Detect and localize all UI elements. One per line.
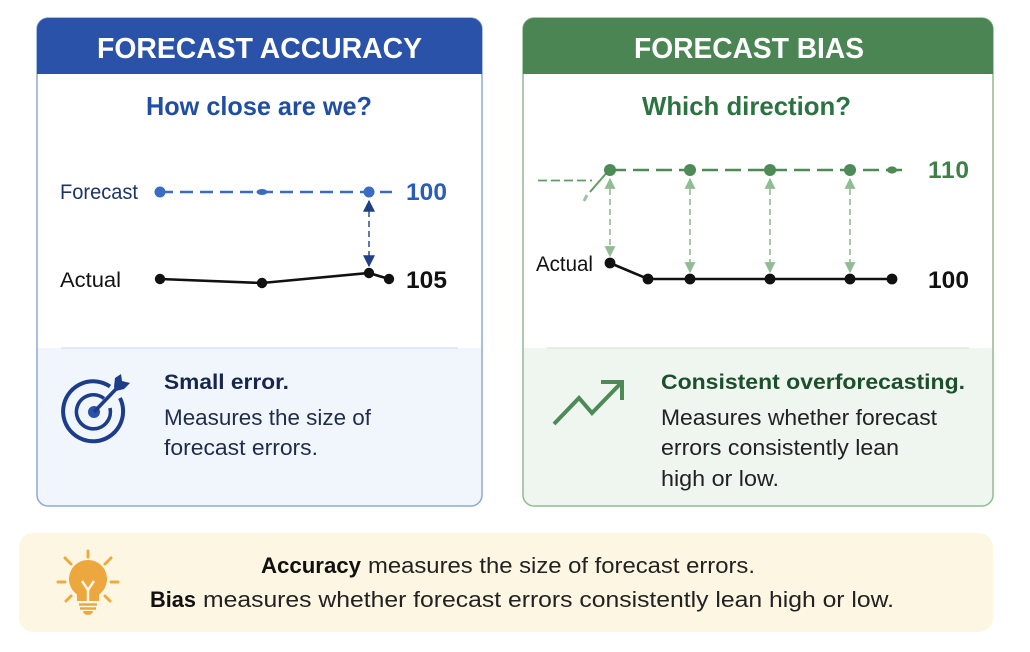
icon: light bulb bbox=[58, 551, 118, 615]
chart: forecast versus actual bbox=[60, 179, 447, 294]
error arrow bbox=[368, 201, 370, 266]
text: bias summary: Bias bbox=[150, 587, 196, 612]
actual label: Actual bbox=[60, 268, 121, 292]
text: small error bbox=[164, 370, 372, 460]
forecast label: Forecast bbox=[60, 181, 138, 204]
text: accuracy summary: Accuracy bbox=[261, 553, 361, 578]
panel: forecast accuracy bbox=[37, 18, 482, 506]
chart: persistent forecast gap bbox=[536, 157, 969, 294]
text: small error: forecast errors. bbox=[164, 435, 318, 460]
text: small error: Small error. bbox=[164, 370, 289, 394]
text: consistent overforecasting: Consistent overforecasting. bbox=[661, 370, 965, 394]
text: consistent overforecasting bbox=[661, 370, 965, 491]
stray forecast lead-in bbox=[538, 170, 609, 201]
icon: upward trend arrow bbox=[554, 382, 622, 424]
forecast dashed line bbox=[154, 186, 392, 198]
callout: summary bbox=[19, 533, 993, 632]
text: small error: Measures the size of bbox=[164, 405, 372, 430]
panel: forecast bias bbox=[523, 18, 993, 506]
forecast dashed line bbox=[604, 164, 908, 176]
icon: target with arrow bbox=[63, 374, 130, 441]
text: consistent overforecasting: high or low. bbox=[661, 466, 779, 491]
actual value: 100 bbox=[928, 267, 969, 294]
gap arrows bbox=[610, 179, 850, 272]
header: forecast accuracy: FORECAST ACCURACY bbox=[97, 33, 422, 65]
header: forecast accuracy bbox=[37, 18, 482, 74]
heading: how close are we: How close are we? bbox=[146, 91, 372, 121]
actual line bbox=[605, 258, 897, 284]
forecast value: 110 bbox=[928, 157, 969, 184]
actual label: Actual bbox=[536, 253, 593, 276]
text: bias summary: measures whether forecast errors consistently lean high or low. bbox=[203, 587, 894, 612]
heading: which direction: Which direction? bbox=[642, 91, 851, 121]
actual value: 105 bbox=[406, 267, 447, 294]
text: consistent overforecasting: errors consistently lean bbox=[661, 435, 899, 460]
header: forecast bias bbox=[523, 18, 993, 74]
actual line bbox=[155, 268, 394, 288]
forecast value: 100 bbox=[406, 179, 447, 206]
header: forecast bias: FORECAST BIAS bbox=[634, 33, 864, 65]
text: accuracy summary: measures the size of forecast errors. bbox=[368, 553, 755, 578]
text: consistent overforecasting: Measures whether forecast bbox=[661, 405, 938, 430]
